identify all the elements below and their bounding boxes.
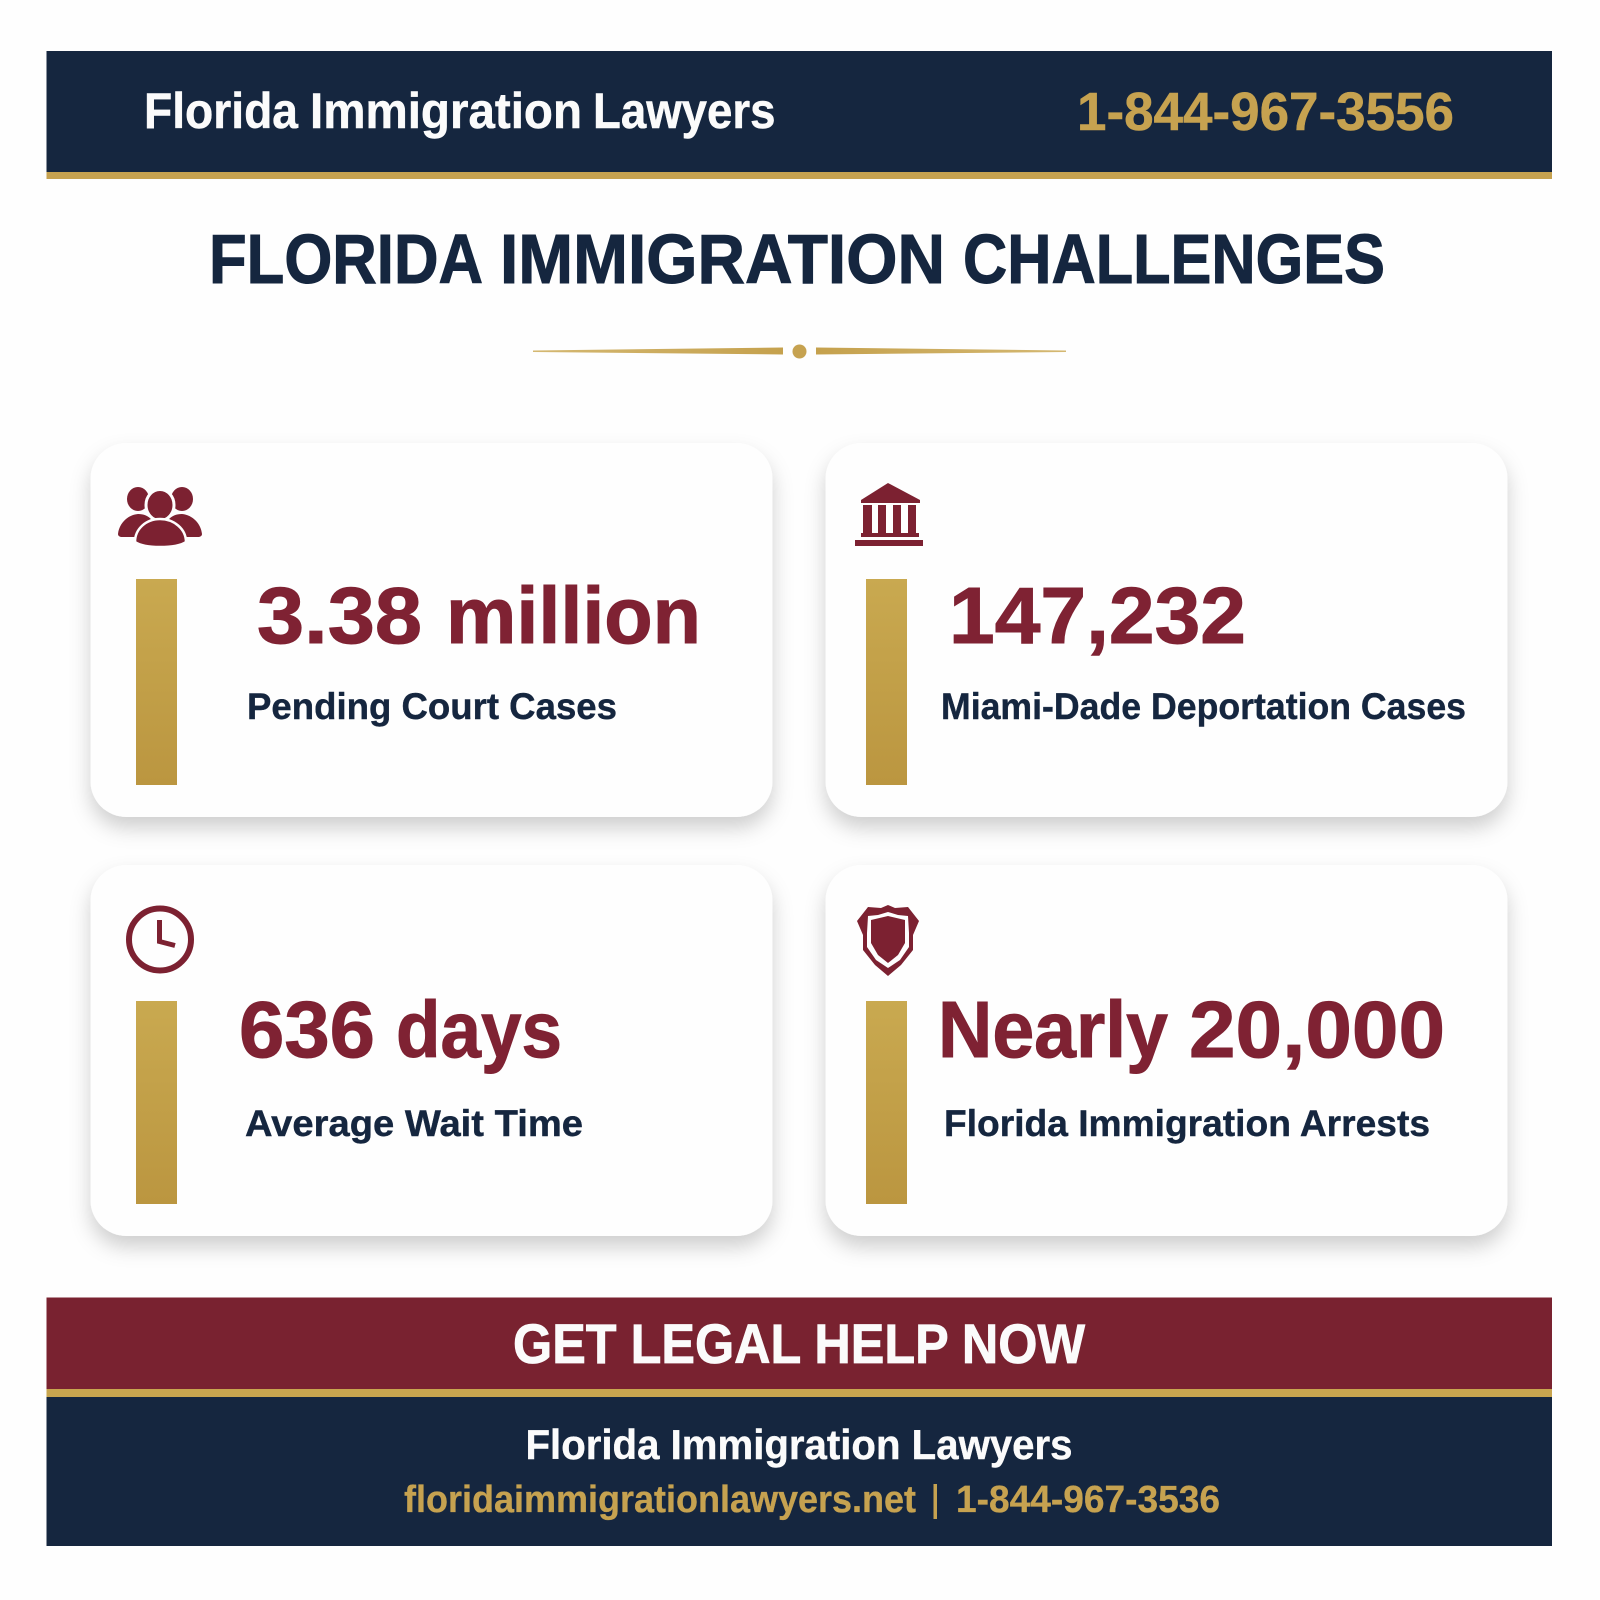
- call to action banner: [46, 1298, 1552, 1390]
- statistic: nearly 20,000: Nearly: [938, 985, 1168, 1074]
- icon: group of people: [118, 487, 202, 547]
- label: miami-dade deportation cases: Miami-Dade Deportation Cases: [941, 686, 1466, 727]
- icon: shield badge: [857, 905, 919, 976]
- header firm name: Immigration: [310, 83, 582, 139]
- top header bar: [46, 51, 1552, 179]
- gold accent bar: [136, 1001, 177, 1204]
- statistic: 636 days: days: [396, 985, 562, 1074]
- gold accent bar: [866, 579, 907, 785]
- gold accent bar: [866, 1001, 907, 1204]
- title divider ornament: [533, 344, 1066, 358]
- footer firm name: Florida Immigration Lawyers: [526, 1421, 1072, 1468]
- footer website: floridaimmigrationlawyers.net: [404, 1479, 916, 1521]
- panel: miami-dade deportation cases: [826, 443, 1508, 817]
- header firm name: [144, 83, 776, 139]
- footer phone number: 1-844-967-3536: [956, 1479, 1220, 1521]
- statistic: 3.38 million: 3.38: [257, 571, 422, 660]
- main title: IMMIGRATION: [500, 220, 945, 298]
- statistic: 3.38 million: [257, 571, 701, 660]
- panel: florida immigration arrests: [826, 865, 1508, 1236]
- statistic: 636 days: [239, 985, 562, 1074]
- main title: CHALLENGES: [963, 220, 1385, 298]
- icon: courthouse: [855, 483, 923, 546]
- icon: clock: [129, 908, 191, 970]
- panel: average wait time: [90, 865, 772, 1236]
- statistic: nearly 20,000: 20,000: [1189, 985, 1445, 1074]
- panel: pending court cases: [90, 443, 772, 817]
- label: pending court cases: Pending Court Cases: [247, 686, 617, 727]
- gold accent bar: [136, 579, 177, 785]
- call to action text: GET LEGAL HELP NOW: [513, 1312, 1085, 1375]
- header phone number: 1-844-967-3556: [1077, 82, 1454, 142]
- statistic: 636 days: 636: [239, 985, 375, 1074]
- footer separator: [934, 1484, 937, 1519]
- main title: FLORIDA: [209, 220, 483, 298]
- statistic: 3.38 million: million: [446, 571, 701, 660]
- statistic: 147,232: 147,232: [949, 571, 1246, 660]
- main title: [209, 220, 1385, 298]
- label: average wait time: Average Wait Time: [245, 1103, 583, 1144]
- statistic: nearly 20,000: [938, 985, 1445, 1074]
- footer panel: [46, 1389, 1552, 1546]
- header firm name: Florida: [144, 83, 299, 139]
- header firm name: Lawyers: [593, 83, 776, 139]
- label: florida immigration arrests: Florida Immigration Arrests: [944, 1103, 1430, 1144]
